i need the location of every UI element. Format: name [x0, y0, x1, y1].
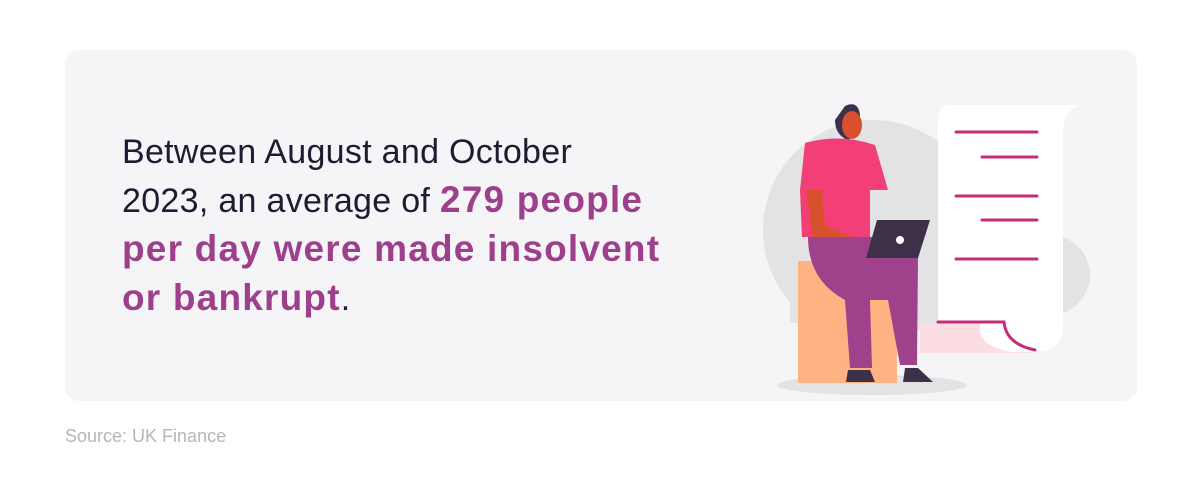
shadow	[777, 375, 967, 395]
main statement text: or bankrupt.	[122, 277, 351, 318]
main statement text: 2023, an average of 279 people	[122, 179, 643, 220]
pink strip	[920, 323, 1030, 353]
background blobs	[763, 120, 1090, 340]
main statement text	[122, 133, 660, 318]
main statement text: Between August and October	[122, 133, 572, 171]
main statement text: per day were made insolvent	[122, 228, 660, 269]
source note: Source: UK Finance	[65, 426, 226, 446]
person	[800, 104, 933, 382]
card panel	[65, 50, 1137, 401]
box seat	[798, 261, 897, 383]
paper document	[938, 105, 1080, 352]
